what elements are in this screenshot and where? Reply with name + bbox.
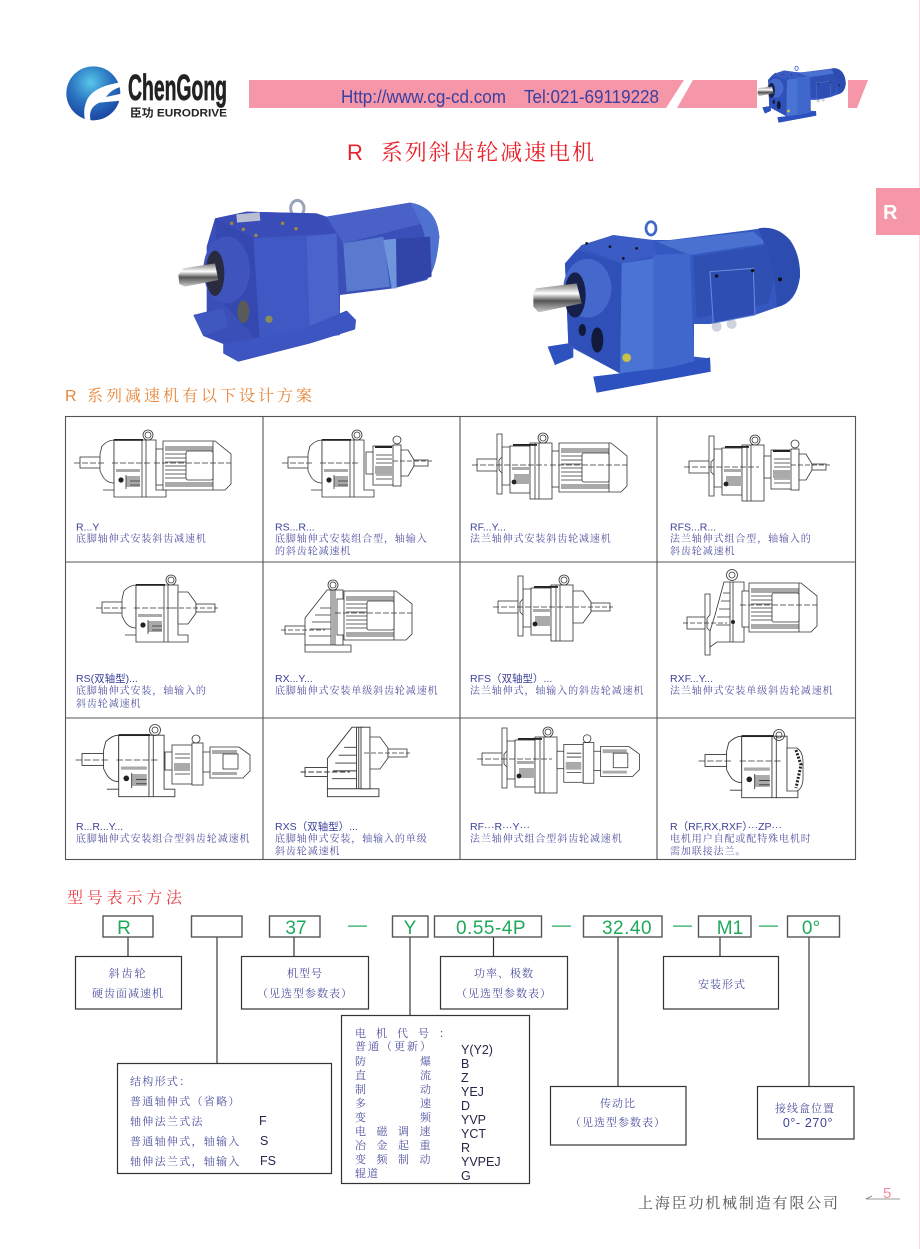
note: structure form: 普通轴伸式，轴输入 (130, 1134, 241, 1148)
cell: RF…R…Y… (470, 727, 639, 845)
photo: gear motor left (178, 200, 439, 362)
code box: 37 (270, 916, 320, 939)
code box: 32.40: 32.40 (602, 918, 652, 939)
code box: 0.55-4P (434, 916, 542, 939)
page number (866, 1185, 900, 1202)
cell: RF...Y...: 法兰轴伸式安装斜齿轮减速机 (470, 532, 612, 545)
note: motor codes: 变频 (355, 1110, 485, 1124)
note: motor codes: D (461, 1099, 470, 1113)
code box: M1 (698, 916, 751, 939)
cell: RFS (双轴型) ...: 法兰轴伸式，轴输入的斜齿轮减速机 (470, 684, 644, 697)
note: transmission ratio: 传动比 (600, 1096, 636, 1110)
note: terminal box position (758, 1086, 854, 1139)
photo: gear motor right (533, 222, 800, 393)
note: motor codes: Z (461, 1071, 469, 1085)
table grid (66, 416, 856, 860)
code box: empty (192, 916, 242, 937)
cell: RS...R... (275, 430, 432, 558)
logo: 臣功 EURODRIVE (130, 106, 227, 120)
note: motor codes (342, 1016, 530, 1184)
connector lines (128, 937, 809, 1086)
note: helical gear (76, 956, 182, 1009)
cell: R...R...Y...: R...R...Y... (76, 821, 123, 833)
code box: 37: 37 (285, 918, 307, 939)
note: helical gear: 斜齿轮 (109, 966, 147, 980)
heading: model notation: 型号表示方法 (67, 888, 183, 907)
note: power and poles: 功率、极数 (474, 966, 534, 980)
side tab R (876, 188, 920, 235)
header banner: Tel:021-69119228 (524, 87, 659, 107)
cell: RFS...R...: 法兰轴伸式组合型，轴输入的 (670, 532, 812, 545)
footer company name: 上海臣功机械制造有限公司 (638, 1194, 838, 1212)
cell: RFS...R... (670, 435, 830, 558)
note: transmission ratio: （见选型参数表） (570, 1115, 666, 1129)
note: structure form (118, 1064, 332, 1174)
note: power and poles: （见选型参数表） (456, 986, 552, 1000)
note: motor codes: YEJ (461, 1085, 484, 1099)
cell: RXS (双轴型) ...: 底脚轴伸式安装，轴输入的单级 (275, 832, 428, 845)
note: motor codes: 普通（更新） (355, 1039, 433, 1053)
note: structure form: 结构形式： (130, 1074, 192, 1088)
note: transmission ratio (550, 1086, 686, 1145)
cell: RF...Y...: RF...Y... (470, 522, 506, 534)
dash (759, 926, 778, 927)
cell: R (RF,RX,RXF)…ZP…: 电机用户自配或配特殊电机时 (670, 832, 812, 845)
cell: RFS (双轴型) ...: RFS（双轴型）... (470, 672, 552, 685)
cell: RS...R...: 的斜齿轮减速机 (275, 544, 351, 558)
note: motor codes: 防爆 (355, 1054, 485, 1068)
note: motor codes: Y(Y2) (461, 1043, 493, 1057)
note: motor codes: YCT (461, 1127, 486, 1141)
note: motor codes: 制动 (355, 1082, 485, 1096)
note: frame size (242, 956, 368, 1009)
cell: RF...Y... (470, 433, 627, 545)
cell: R (RF,RX,RXF)…ZP…: R（RF,RX,RXF）···ZP··· (670, 821, 782, 833)
note: structure form: F (259, 1114, 267, 1128)
note: motor codes: 电机代号： (355, 1026, 460, 1040)
cell: RF…R…Y…: 法兰轴伸式组合型斜齿轮减速机 (470, 832, 623, 845)
cell: RX...Y...: RX...Y... (275, 673, 313, 685)
code box: Y: Y (404, 918, 417, 939)
cell: RXS (双轴型) ... (275, 727, 428, 858)
cell: RF…R…Y…: RF···R···Y··· (470, 821, 530, 833)
cell: RS(双轴型)...: 底脚轴伸式安装，轴输入的 (76, 684, 207, 697)
cell: R...Y: R...Y (76, 522, 99, 534)
note: structure form: FS (260, 1154, 276, 1168)
note: terminal box position: 0°- 270° (783, 1116, 833, 1130)
code box: R (103, 916, 153, 939)
note: motor codes: YVPEJ (461, 1155, 501, 1169)
code box: 32.40 (584, 916, 662, 939)
cell: R...Y: 底脚轴伸式安装斜齿减速机 (76, 532, 207, 545)
note: structure form: 轴伸法兰式，轴输入 (130, 1154, 241, 1168)
code box: 0.55-4P: 0.55-4P (456, 918, 526, 939)
dash (552, 926, 571, 927)
icon: header motor (758, 66, 846, 123)
cell: RS(双轴型)...: RS(双轴型)... (76, 672, 138, 685)
cell: R...Y (74, 430, 231, 545)
cell: RS(双轴型)...: 斜齿轮减速机 (76, 697, 141, 710)
cell: R...R...Y...: 底脚轴伸式安装组合型斜齿轮减速机 (76, 832, 250, 845)
cell: R (RF,RX,RXF)…ZP…: 需加联接法兰。 (670, 844, 746, 858)
page number: 5 (883, 1185, 891, 1202)
note: power and poles (440, 956, 568, 1009)
note: helical gear: 硬齿面减速机 (92, 986, 164, 1000)
note: mounting form (664, 956, 778, 1009)
note: structure form: 轴伸法兰式法 (130, 1114, 204, 1128)
note: motor codes: 直流 (355, 1068, 485, 1082)
header banner: Http://www.cg-cd.com (341, 87, 506, 107)
cell: R...R...Y... (76, 724, 250, 845)
cell: RFS...R...: RFS...R... (670, 522, 716, 534)
header banner (249, 80, 868, 108)
dash (673, 926, 692, 927)
title: R 系列斜齿轮减速电机 (347, 140, 594, 165)
cell: RS...R...: RS...R... (275, 522, 315, 534)
note: motor codes: 变频制动 (355, 1152, 441, 1166)
note: mounting form: 安装形式 (698, 977, 746, 991)
note: motor codes: B (461, 1057, 469, 1071)
code box: M1: M1 (717, 918, 743, 939)
note: motor codes: YVP (461, 1113, 486, 1127)
heading: design options: R 系列减速机有以下设计方案 (65, 387, 312, 405)
note: motor codes: 辊道 (355, 1167, 379, 1180)
note: motor codes: 多速 (355, 1096, 485, 1110)
logo (66, 66, 227, 121)
note: structure form: S (260, 1134, 268, 1148)
logo: ChenGong (128, 67, 227, 108)
note: terminal box position: 接线盒位置 (775, 1101, 835, 1115)
note: motor codes: R (461, 1141, 470, 1155)
cell: RS(双轴型)... (76, 575, 218, 710)
note: frame size: 机型号 (287, 966, 323, 980)
code box: 0° (788, 916, 840, 939)
note: structure form: 普通轴伸式（省略） (130, 1094, 241, 1108)
cell: R (RF,RX,RXF)…ZP… (670, 730, 812, 858)
cell: RFS...R...: 斜齿轮减速机 (670, 544, 735, 558)
cell: RXF...Y...: RXF...Y... (670, 673, 713, 685)
code box: R: R (117, 918, 131, 939)
cell: RXF...Y... (670, 570, 834, 697)
cell: RXF...Y...: 法兰轴伸式安装单级斜齿轮减速机 (670, 684, 834, 697)
side tab R: R (883, 202, 898, 224)
note: frame size: （见选型参数表） (257, 986, 353, 1000)
cell: RXS (双轴型) ...: 斜齿轮减速机 (275, 844, 340, 858)
dash (348, 926, 367, 927)
note: motor codes: 电磁调速 (355, 1124, 441, 1138)
cell: RS...R...: 底脚轴伸式安装组合型，轴输入 (275, 532, 428, 545)
cell: RX...Y... (275, 580, 438, 697)
note: motor codes: 冶金起重 (355, 1138, 441, 1152)
code box: Y (392, 916, 428, 939)
page edge line (919, 0, 920, 1249)
cell: RFS (双轴型) ... (470, 575, 644, 697)
code box: 0°: 0° (802, 918, 820, 939)
cell: RXS (双轴型) ...: RXS（双轴型）... (275, 820, 358, 833)
cell: RX...Y...: 底脚轴伸式安装单级斜齿轮减速机 (275, 684, 438, 697)
note: motor codes: G (461, 1169, 471, 1183)
